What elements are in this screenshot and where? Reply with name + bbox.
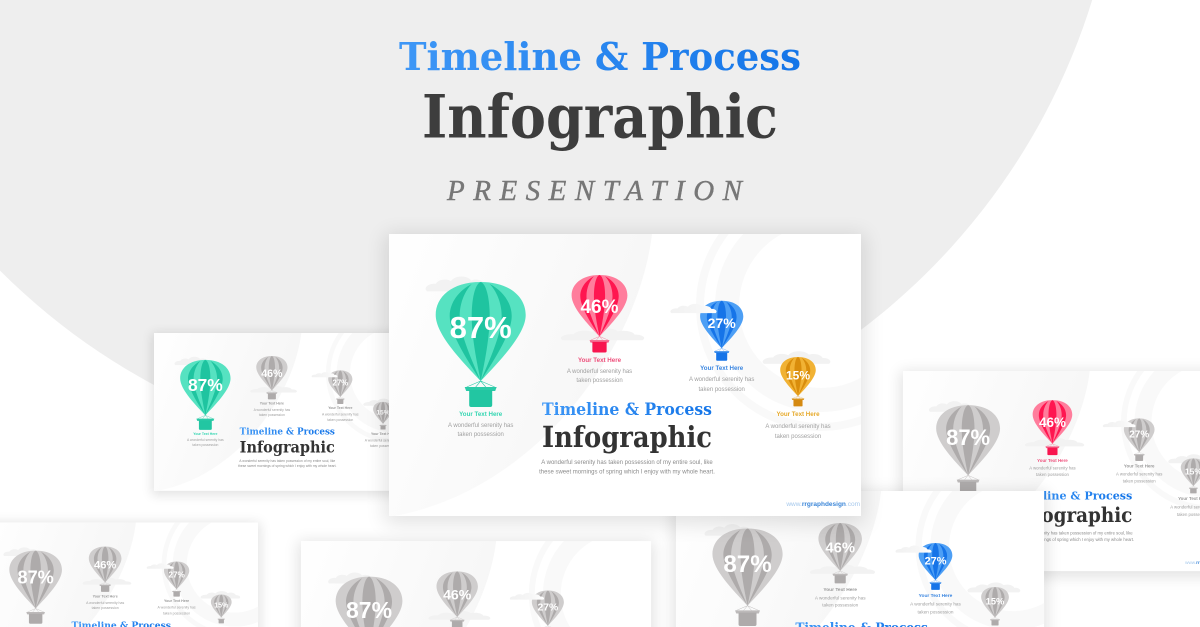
balloon 87% xyxy=(180,360,231,447)
slide preview: right, red balloon highlighted xyxy=(896,368,1200,580)
balloon 27%: A wonderful serenity has xyxy=(910,602,962,607)
slide description: these sweet mornings of spring which I enjoy with my whole heart. xyxy=(238,464,337,468)
balloon 15% xyxy=(981,587,1009,625)
balloon 15%: taken possession xyxy=(370,444,396,448)
balloon 27%: Your Text Here xyxy=(1124,464,1155,469)
balloon 46%: A wonderful serenity has xyxy=(86,601,124,605)
balloon 46%: 46% xyxy=(1039,415,1066,430)
balloon 46%: A wonderful serenity has xyxy=(815,595,866,600)
balloon 27%: Your Text Here xyxy=(164,599,189,603)
website link: www.rrgraphdesign.com xyxy=(785,501,860,508)
balloon 46%: Your Text Here xyxy=(260,402,284,406)
balloon 27%: 27% xyxy=(168,570,186,579)
balloon 87%: taken possession xyxy=(458,432,504,438)
slide description xyxy=(539,460,715,476)
balloon 46%: Your Text Here xyxy=(578,357,622,364)
balloon 27%: Your Text Here xyxy=(328,406,352,410)
balloon 27%: taken possession xyxy=(327,418,353,422)
balloon 87%: 87% xyxy=(450,310,512,345)
balloon 46%: taken possession xyxy=(92,606,119,610)
balloon 87%: A wonderful serenity has xyxy=(448,423,513,429)
balloon 15%: Your Text Here xyxy=(371,432,395,436)
balloon 87%: Your Text Here xyxy=(193,432,217,436)
balloon 27%: A wonderful serenity has xyxy=(689,377,754,383)
balloon 46%: A wonderful serenity has xyxy=(567,369,632,375)
balloon 46%: 46% xyxy=(580,297,619,318)
balloon 15% xyxy=(211,594,232,623)
balloon 87%: Your Text Here xyxy=(459,411,503,418)
balloon 15%: A wonderful serenity has xyxy=(365,439,402,443)
balloon 87% xyxy=(712,528,783,626)
balloon 15% xyxy=(364,402,389,448)
balloon 46% xyxy=(254,356,290,417)
slide title xyxy=(240,426,335,456)
heading: Timeline & Process: Timeline & Process xyxy=(399,35,801,80)
balloon 15%: 15% xyxy=(986,596,1005,606)
balloon 46%: taken possession xyxy=(1036,472,1070,477)
balloon 87% xyxy=(9,551,62,624)
balloon 87%: A wonderful serenity has xyxy=(187,438,224,442)
balloon 46% xyxy=(86,546,124,610)
balloon 46%: A wonderful serenity has xyxy=(1029,466,1076,471)
slide title: Infographic xyxy=(240,437,335,456)
slide title xyxy=(542,400,712,454)
balloon 87%: 87% xyxy=(346,597,392,623)
balloon 27%: A wonderful serenity has xyxy=(322,412,359,416)
balloon 27% xyxy=(158,562,196,615)
balloon 27% xyxy=(1116,418,1162,483)
balloon 27% xyxy=(322,370,359,422)
balloon 87% xyxy=(936,405,1000,494)
slide description: A wonderful serenity has taken possession of my entire soul, like xyxy=(239,459,335,463)
balloon 46%: taken possession xyxy=(576,378,623,384)
balloon 87%: 87% xyxy=(946,425,990,450)
slide description xyxy=(1044,531,1134,542)
slide description: these sweet mornings of spring which I enjoy with my whole heart. xyxy=(1010,537,1134,542)
slide title: Timeline & Process xyxy=(542,400,712,419)
balloon 46% xyxy=(1029,400,1076,477)
balloon 46%: taken possession xyxy=(259,413,285,417)
balloon 87%: 87% xyxy=(188,375,223,395)
slide title xyxy=(1044,491,1132,527)
balloon 27%: A wonderful serenity has xyxy=(1116,471,1162,476)
balloon 27%: 27% xyxy=(537,603,558,614)
balloon 27%: taken possession xyxy=(699,387,745,393)
balloon 27%: 27% xyxy=(925,555,947,567)
balloon 27%: taken possession xyxy=(1123,478,1156,483)
balloon 27%: Your Text Here xyxy=(919,593,953,599)
balloon 87%: taken possession xyxy=(192,443,218,447)
slide preview: bottom middle, all grey xyxy=(294,538,658,627)
balloon 27% xyxy=(689,301,754,393)
balloon 27%: taken possession xyxy=(163,611,190,615)
balloon 15%: Your Text Here xyxy=(776,411,820,418)
balloon 87%: 87% xyxy=(723,551,772,578)
balloon 27%: taken possession xyxy=(918,609,954,614)
balloon 87% xyxy=(336,577,402,627)
slide preview: bottom right, blue balloon highlighted xyxy=(669,488,1051,627)
balloon 46%: 46% xyxy=(94,560,116,572)
balloon 46%: taken possession xyxy=(822,602,859,607)
slide description xyxy=(238,459,337,468)
slide title: Timeline & Process xyxy=(240,426,335,437)
slide title: Infographic xyxy=(542,420,712,454)
balloon 15% xyxy=(1170,458,1200,517)
balloon 46%: 46% xyxy=(825,541,855,557)
slide title: Infographic xyxy=(1012,503,1132,527)
balloon 15%: A wonderful serenity has xyxy=(765,424,831,430)
balloon 15%: 15% xyxy=(376,409,390,416)
balloon 27%: 27% xyxy=(708,315,736,331)
slide title: Timeline & Process xyxy=(1012,489,1133,503)
balloon 46%: Your Text Here xyxy=(823,587,857,593)
balloon 46%: 46% xyxy=(443,587,472,603)
balloon 27%: 27% xyxy=(1129,430,1149,441)
balloon 27%: Your Text Here xyxy=(700,365,744,372)
balloon 27%: 27% xyxy=(332,379,348,388)
balloon 15%: 15% xyxy=(786,368,810,382)
balloon 87%: 87% xyxy=(18,567,54,587)
balloon 46%: Your Text Here xyxy=(1037,458,1068,463)
balloon 46% xyxy=(815,523,866,607)
slide description: these sweet mornings of spring which I enjoy with my whole heart. xyxy=(539,470,715,476)
subheading: Presentation: PRESENTATION xyxy=(446,175,744,207)
slide description: A wonderful serenity has taken possession of my entire soul, like xyxy=(1011,530,1133,535)
balloon 27% xyxy=(532,590,564,627)
balloon 15%: 15% xyxy=(214,603,229,610)
balloon 15%: taken possession xyxy=(775,434,821,440)
balloon 27%: A wonderful serenity has xyxy=(158,605,196,609)
balloon 27% xyxy=(910,543,962,614)
background: large grey circle xyxy=(0,0,1122,463)
slide preview: bottom left, all grey xyxy=(0,520,264,627)
balloon 46%: 46% xyxy=(261,368,283,380)
balloon 46% xyxy=(567,275,632,384)
main slide xyxy=(380,229,870,529)
heading: Infographic: Infographic xyxy=(422,82,778,152)
slide preview: left, teal balloon highlighted xyxy=(149,330,389,498)
slide description: A wonderful serenity has taken possession of my entire soul, like xyxy=(541,460,713,466)
balloon 87% xyxy=(436,282,526,438)
balloon 46% xyxy=(436,571,478,627)
balloon 46%: A wonderful serenity has xyxy=(254,408,290,412)
balloon 15% xyxy=(765,357,831,440)
balloon 46%: Your Text Here xyxy=(93,594,118,598)
